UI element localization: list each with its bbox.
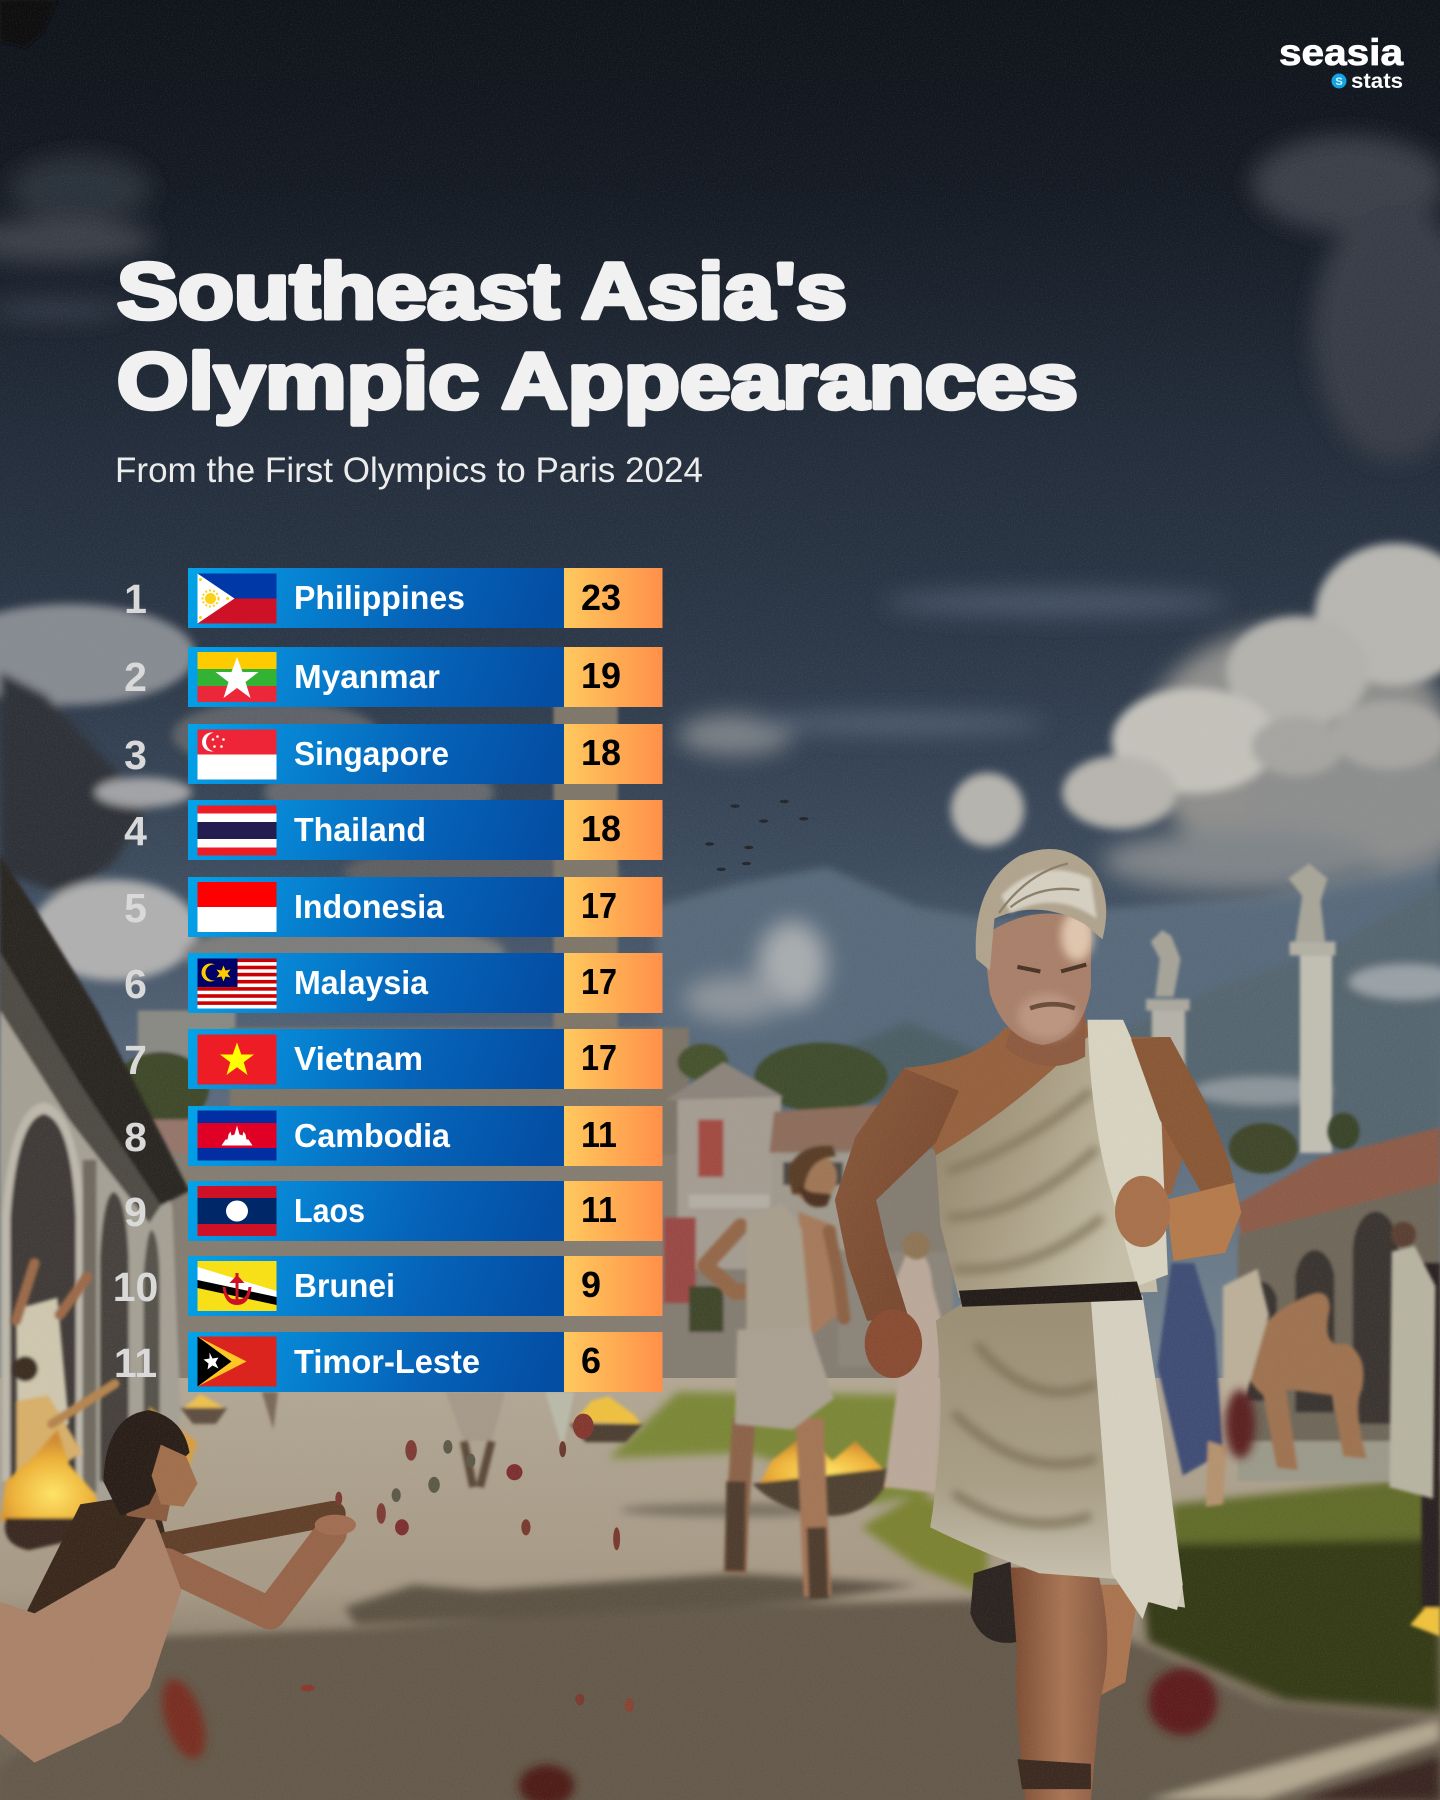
row 3: Singapore: 3 xyxy=(124,732,147,778)
row 3: Singapore: Singapore xyxy=(294,735,449,772)
neck xyxy=(1005,1011,1085,1066)
main runner xyxy=(835,849,1241,1800)
belt xyxy=(959,1282,1143,1307)
far arm xyxy=(167,1513,333,1545)
logo icon: S xyxy=(1335,76,1343,88)
lower toga folds xyxy=(953,1344,1097,1523)
row 9: Laos: 9 xyxy=(124,1189,147,1235)
flag: Timor-Leste xyxy=(198,1336,276,1386)
left arm xyxy=(835,1068,959,1321)
right fist xyxy=(1115,1176,1170,1247)
dark clouds upper sky xyxy=(0,136,1440,756)
row 2: Myanmar: 19 xyxy=(581,655,621,696)
right colonnade building xyxy=(1229,1113,1440,1481)
face xyxy=(152,1445,198,1507)
right arm xyxy=(1131,1037,1241,1261)
left fist xyxy=(865,1309,922,1378)
row 6: Malaysia: Malaysia xyxy=(294,964,429,1001)
flag: Myanmar xyxy=(198,652,276,702)
title xyxy=(117,246,1078,425)
row 8: Cambodia: 8 xyxy=(124,1114,147,1160)
woman in blue xyxy=(1158,1263,1223,1476)
row 8: Cambodia: Cambodia xyxy=(294,1117,451,1154)
front leg xyxy=(1011,1567,1107,1800)
second runner xyxy=(705,1146,844,1598)
woman in pale robe xyxy=(884,1251,942,1493)
row 5: Indonesia: 17 xyxy=(581,885,617,926)
row 11: Timor-Leste: 6 xyxy=(581,1340,601,1381)
distant column behind the list xyxy=(553,689,618,1148)
row 7: Vietnam: 17 xyxy=(581,1037,617,1078)
row 1: Philippines: Philippines xyxy=(294,579,465,616)
head xyxy=(789,1153,837,1201)
left clouds and dark mountain xyxy=(0,604,620,985)
row 5: Indonesia: 5 xyxy=(124,885,147,931)
logo: seasia stats xyxy=(1279,32,1403,93)
background figures xyxy=(262,1222,1435,1507)
drape xyxy=(0,1510,181,1763)
row 7: Vietnam: 7 xyxy=(124,1037,147,1083)
far columns with statues xyxy=(1146,864,1336,1153)
bare chest xyxy=(798,1211,844,1338)
row 5: Indonesia: Indonesia xyxy=(294,888,445,925)
row 7: Vietnam xyxy=(124,1029,662,1089)
flag: Indonesia xyxy=(198,882,276,932)
row 4: Thailand xyxy=(124,800,662,860)
legs xyxy=(735,1418,744,1573)
row 4: Thailand: 18 xyxy=(581,808,621,849)
blurred foreground petals xyxy=(153,1389,1255,1800)
hair xyxy=(976,849,1106,970)
grass patches xyxy=(609,1392,1440,1711)
face xyxy=(983,914,1091,1045)
dark back xyxy=(23,1493,167,1636)
small figures on the path xyxy=(446,1392,505,1441)
row 8: Cambodia xyxy=(124,1106,662,1166)
rear leg xyxy=(1089,1585,1139,1697)
row 2: Myanmar: 2 xyxy=(124,654,147,700)
ranking list xyxy=(113,568,662,1392)
row 6: Malaysia: 17 xyxy=(581,961,617,1002)
mid-ground temples and houses xyxy=(113,1011,953,1389)
flag: Malaysia xyxy=(198,958,276,1008)
big cumulus cloud right xyxy=(683,543,1440,1022)
row 11: Timor-Leste xyxy=(114,1332,662,1392)
worshippers under the arcade xyxy=(13,1263,115,1493)
row 10: Brunei: 9 xyxy=(581,1264,601,1305)
row 4: Thailand: 4 xyxy=(124,808,147,854)
toga folds xyxy=(947,1091,1102,1269)
toga sash xyxy=(1087,1020,1168,1286)
row 11: Timor-Leste: 11 xyxy=(114,1340,157,1386)
flag: Laos xyxy=(198,1186,276,1236)
row 3: Singapore xyxy=(124,724,662,784)
subtitle: From the First Olympics to Paris 2024 xyxy=(115,451,703,490)
row 1: Philippines: 23 xyxy=(581,577,621,618)
row 6: Malaysia: 6 xyxy=(124,961,147,1007)
logo: seasia stats: stats xyxy=(1351,70,1403,93)
title: Southeast Asia's xyxy=(117,246,847,335)
birds xyxy=(705,800,808,871)
lower toga xyxy=(930,1295,1185,1608)
fire bowls xyxy=(0,1263,1440,1636)
ankle band xyxy=(1017,1759,1091,1789)
shoulders and chest xyxy=(904,1022,1200,1206)
arms xyxy=(705,1226,779,1292)
tree branch top left corner xyxy=(0,0,57,48)
woman in white dress xyxy=(1389,1246,1435,1499)
flag: Cambodia xyxy=(198,1110,276,1160)
row 9: Laos: 11 xyxy=(581,1189,617,1230)
couple behind xyxy=(1223,1269,1269,1412)
row 10: Brunei xyxy=(113,1256,662,1316)
title: Olympic Appearances xyxy=(117,336,1078,425)
row 10: Brunei: 10 xyxy=(113,1264,158,1310)
row 2: Myanmar xyxy=(124,647,662,707)
hand xyxy=(315,1515,356,1535)
fire: left bowl xyxy=(0,1430,106,1522)
row 1: Philippines: 1 xyxy=(124,576,147,622)
row 6: Malaysia xyxy=(124,953,662,1013)
kilt xyxy=(735,1326,834,1430)
sky xyxy=(0,0,1440,1435)
row 5: Indonesia xyxy=(124,877,662,937)
row 9: Laos: Laos xyxy=(294,1192,365,1229)
flag: Brunei xyxy=(198,1261,276,1311)
row 4: Thailand: Thailand xyxy=(294,811,426,848)
sandal xyxy=(970,1562,1016,1643)
lower toga fold light xyxy=(1091,1295,1183,1619)
row 8: Cambodia: 11 xyxy=(581,1114,617,1155)
ground gravel path xyxy=(0,1378,1440,1800)
near mountains xyxy=(838,884,1440,1148)
hair xyxy=(103,1410,189,1516)
flag: Philippines xyxy=(198,574,276,624)
left arcade xyxy=(0,856,189,1527)
row 9: Laos xyxy=(124,1181,662,1241)
flag: Singapore xyxy=(198,730,276,780)
tunic xyxy=(746,1203,811,1332)
crouching woman xyxy=(0,1410,356,1763)
row 1: Philippines xyxy=(124,568,662,628)
near arm xyxy=(167,1533,331,1613)
far mountains xyxy=(655,850,1440,1148)
bending man xyxy=(1245,1293,1367,1470)
flag: Thailand xyxy=(198,806,276,856)
row 11: Timor-Leste: Timor-Leste xyxy=(294,1343,480,1380)
upper toga xyxy=(936,1028,1158,1298)
neck xyxy=(126,1481,172,1522)
logo: seasia stats: seasia xyxy=(1279,32,1403,73)
flag: Vietnam xyxy=(198,1034,276,1084)
row 7: Vietnam: Vietnam xyxy=(294,1040,423,1077)
foreground shadow on ground xyxy=(0,1503,1440,1800)
rose petals xyxy=(301,1414,634,1712)
row 3: Singapore: 18 xyxy=(581,732,621,773)
row 10: Brunei: Brunei xyxy=(294,1267,395,1304)
row 2: Myanmar: Myanmar xyxy=(294,658,440,695)
